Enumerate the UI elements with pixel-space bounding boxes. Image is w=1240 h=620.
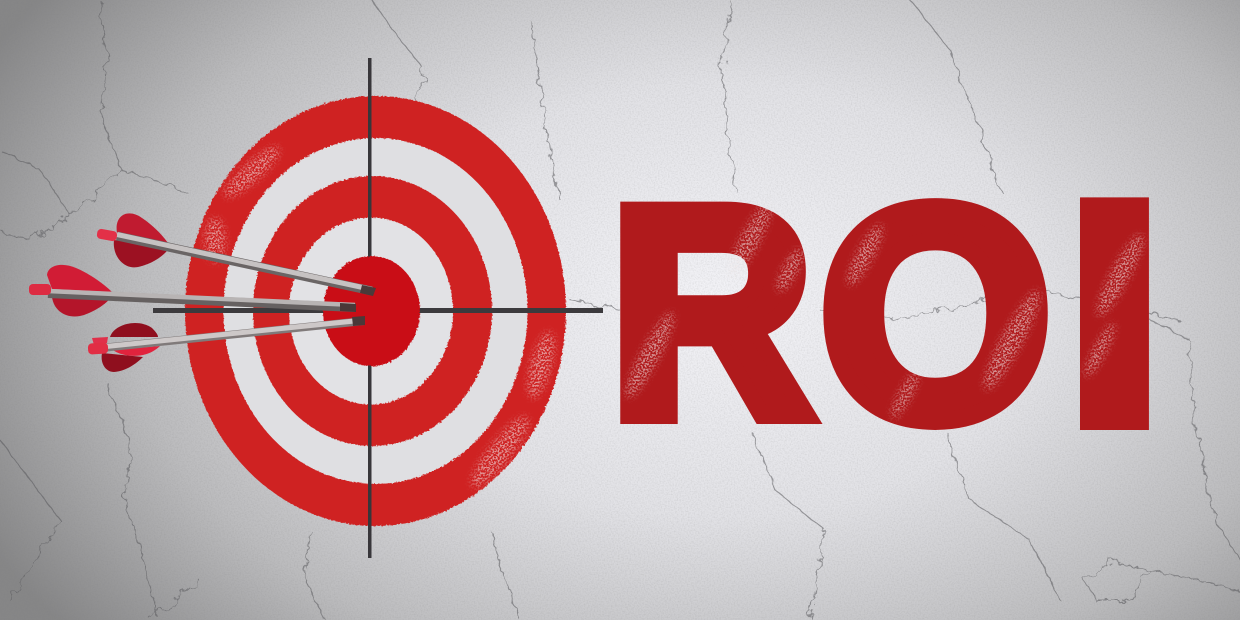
target	[153, 58, 603, 558]
target: bullseye	[323, 256, 420, 366]
crosshair horizontal line	[153, 308, 603, 313]
arrows	[29, 213, 376, 372]
ROI heading	[610, 140, 1162, 488]
letter R: R	[610, 147, 813, 479]
arrow: middle	[29, 265, 356, 316]
letter O: O	[820, 145, 1051, 482]
letter I: I	[1067, 140, 1162, 488]
target: inner white ring	[289, 218, 453, 404]
arrow: bottom	[88, 316, 365, 372]
target: outer white ring	[224, 138, 528, 484]
target: inner red ring	[253, 176, 492, 446]
arrow: top	[96, 213, 376, 296]
crosshair vertical line	[368, 58, 372, 558]
target: outer red ring	[185, 96, 566, 526]
paint wear on target and letters	[205, 141, 1150, 493]
